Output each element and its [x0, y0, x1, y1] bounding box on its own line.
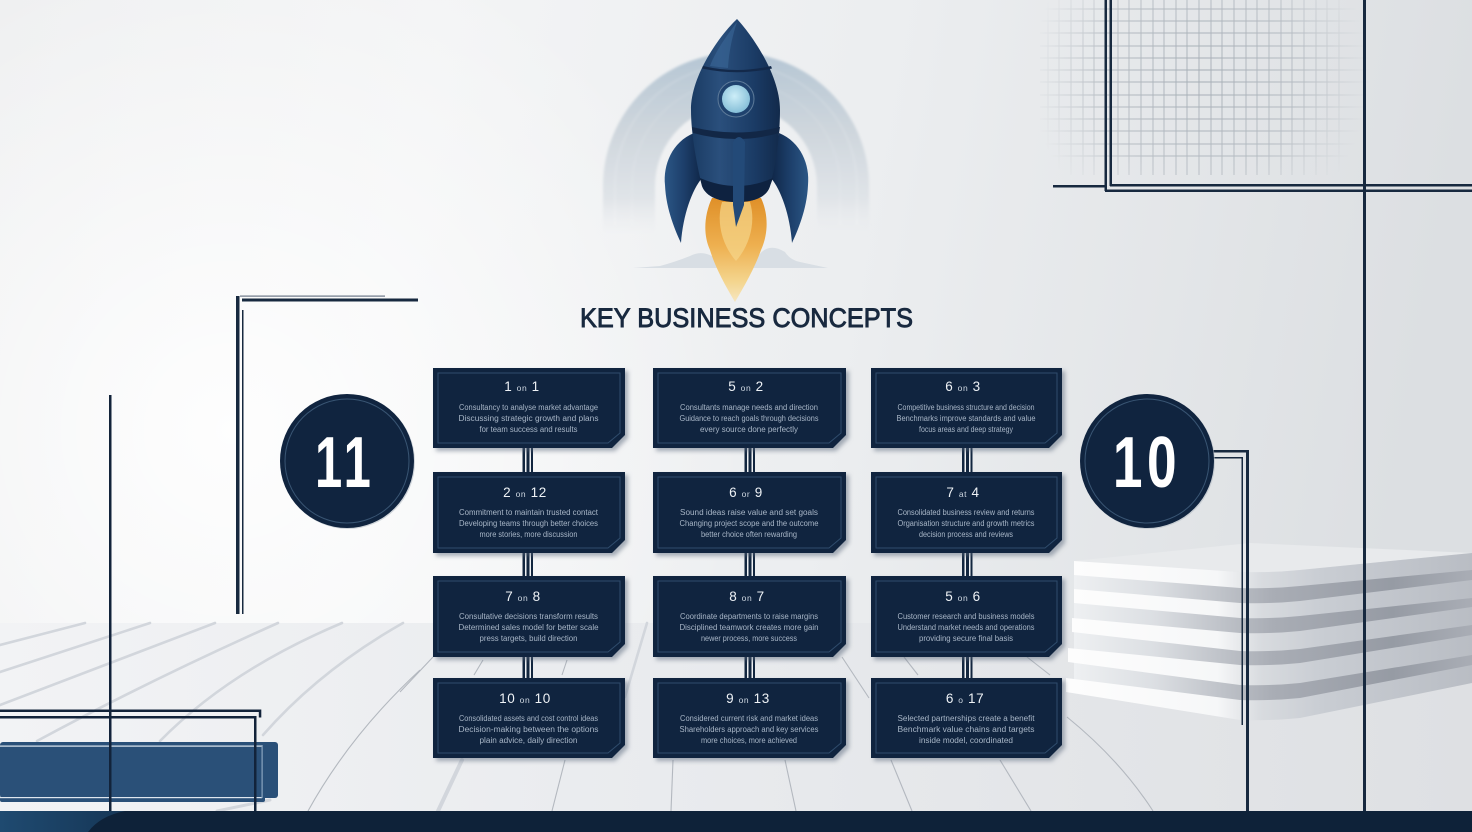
card: 5 on 6: Understand market needs and operations — [898, 623, 1035, 632]
card: 6 on 9: better choice often rewarding — [701, 530, 797, 539]
nose highlight — [710, 22, 737, 68]
frame lines: bottom left bracket — [0, 395, 261, 812]
engine base shade — [700, 178, 773, 202]
card: 8 on 7: Disciplined teamwork creates more gain — [680, 623, 818, 632]
title: KEY BUSINESS CONCEPTS — [580, 303, 913, 333]
card: 7 on 4: decision process and reviews — [919, 530, 1013, 539]
card: 5 on 6: 5 on 6 — [945, 589, 981, 604]
card: 6 on 3: focus areas and deep strategy — [919, 425, 1013, 434]
nose band — [702, 66, 772, 72]
connectors: column 1 — [522, 448, 533, 678]
card: 5 on 6: providing secure final basis — [919, 634, 1013, 643]
circle badge 11: 11 — [315, 423, 375, 503]
card: 6 on 9: 6 or 9 — [729, 485, 763, 500]
card: 5 on 6 — [871, 576, 1062, 657]
card: 1 on 1 — [433, 368, 625, 448]
card: 8 on 7: newer process, more success — [701, 634, 797, 643]
floor with perspective lines — [0, 623, 1472, 813]
card: 7 on 8 — [433, 576, 625, 657]
card: 9 on 13 — [653, 678, 846, 758]
card: 8 on 7: 8 on 7 — [729, 589, 765, 604]
card: 6 on 3 — [871, 368, 1062, 448]
connectors: column 2 — [744, 448, 755, 678]
card: 6 on 17: Benchmark value chains and targets — [898, 725, 1035, 734]
flame core — [720, 202, 752, 261]
card: 1 on 1: Discussing strategic growth and plans — [458, 414, 599, 423]
card: 7 on 4: 7 at 4 — [946, 485, 980, 500]
card: 5 on 2: every source done perfectly — [700, 425, 798, 434]
card: 8 on 7: Coordinate departments to raise margins — [680, 612, 818, 621]
card: 1 on 1: Consultancy to analyse market advantage — [459, 403, 598, 412]
card: 1 on 1: for team success and results — [480, 425, 578, 434]
card: 7 on 4 — [871, 472, 1062, 553]
card: 6 on 3: Benchmarks improve standards and value — [896, 414, 1036, 423]
card: 7 on 4: Consolidated business review and returns — [898, 508, 1035, 517]
cloud and ground line — [633, 248, 828, 268]
halo arc — [603, 53, 869, 235]
card: 9 on 13: Considered current risk and market ideas — [680, 714, 818, 723]
card: 5 on 6: Customer research and business models — [898, 612, 1035, 621]
card: 10 on 10: Decision-making between the options — [458, 725, 599, 734]
blue bar bottom left — [0, 742, 278, 802]
card: 2 on 12 — [433, 472, 625, 553]
card: 7 on 8: press targets, build direction — [480, 634, 578, 643]
card: 6 on 3: Competitive business structure and decision — [898, 403, 1034, 412]
card: 7 on 8: Determined sales model for better scale — [458, 623, 598, 632]
circle badge 10 — [1080, 394, 1215, 529]
card: 1 on 1: 1 on 1 — [504, 379, 540, 394]
right fin — [771, 133, 808, 243]
card: 10 on 10: 10 on 10 — [499, 691, 551, 706]
center fin — [733, 137, 745, 227]
decorative grid — [1040, 0, 1370, 175]
card: 7 on 8: Consultative decisions transform results — [459, 612, 598, 621]
card: 6 on 3: 6 on 3 — [945, 379, 981, 394]
card: 6 on 9: Sound ideas raise value and set goals — [680, 508, 818, 517]
card: 5 on 2: 5 on 2 — [728, 379, 764, 394]
card: 2 on 12: Commitment to maintain trusted contact — [459, 508, 599, 517]
card: 6 on 17: inside model, coordinated — [919, 736, 1013, 745]
card: 5 on 2: Guidance to reach goals through decisions — [680, 414, 819, 423]
card: 10 on 10 — [433, 678, 625, 758]
frame lines: top left corner — [236, 296, 418, 614]
card: 5 on 2 — [653, 368, 846, 448]
circle badge 11 — [280, 394, 415, 529]
card: 8 on 7 — [653, 576, 846, 657]
card: 2 on 12: Developing teams through better choices — [459, 519, 598, 528]
connectors: column 3 — [962, 448, 972, 678]
card: 10 on 10: Consolidated assets and cost control ideas — [459, 714, 598, 723]
stacked white plates — [1066, 543, 1472, 720]
window — [718, 81, 754, 117]
card: 7 on 8: 7 on 8 — [505, 589, 541, 604]
rocket illustration — [603, 19, 869, 302]
bottom band — [0, 811, 1472, 832]
card: 10 on 10: plain advice, daily direction — [480, 736, 578, 745]
card: 9 on 13: 9 on 13 — [726, 691, 770, 706]
rocket body — [691, 19, 780, 202]
card: 2 on 12: more stories, more discussion — [480, 530, 578, 539]
flame — [705, 198, 767, 302]
circle badge 10: 10 — [1113, 423, 1181, 503]
card: 6 on 17: 6 o 17 — [946, 691, 984, 706]
card: 6 on 17 — [871, 678, 1062, 758]
card: 6 on 9 — [653, 472, 846, 553]
card: 5 on 2: Consultants manage needs and direction — [680, 403, 818, 412]
card: 6 on 17: Selected partnerships create a benefit — [898, 714, 1035, 723]
card: 2 on 12: 2 on 12 — [503, 485, 547, 500]
card: 9 on 13: Shareholders approach and key services — [680, 725, 819, 734]
left fin — [665, 133, 702, 243]
frame lines: bracket right of circle 10 — [1205, 450, 1249, 812]
card: 7 on 4: Organisation structure and growth metrics — [898, 519, 1035, 528]
mid band — [692, 127, 780, 139]
card: 6 on 9: Changing project scope and the outcome — [680, 519, 818, 528]
card: 9 on 13: more choices, more achieved — [701, 736, 797, 745]
frame lines: top right — [1053, 0, 1472, 812]
